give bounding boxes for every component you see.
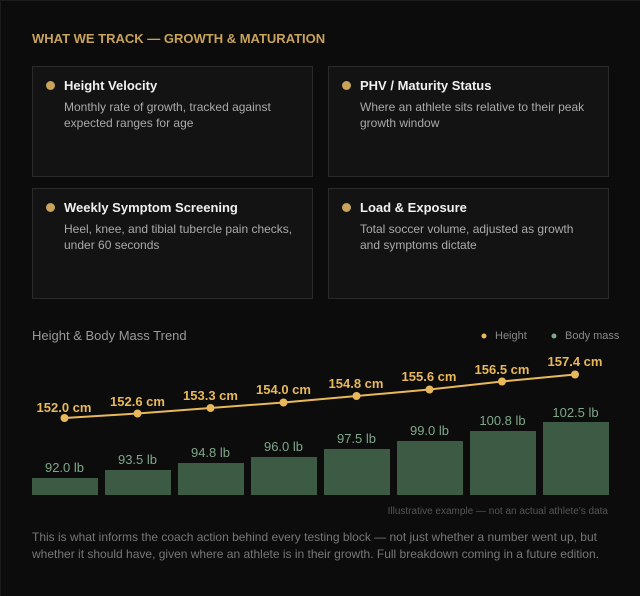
card text bbox=[64, 100, 271, 130]
card text: expected ranges for age bbox=[64, 116, 193, 130]
height line bbox=[64, 374, 575, 418]
body mass bars bbox=[32, 422, 609, 495]
panel: load and exposure bbox=[328, 188, 609, 299]
legend: Body mass bbox=[565, 330, 620, 342]
body mass labels: 93.5 lb bbox=[118, 452, 157, 467]
legend bbox=[482, 330, 620, 342]
panel: PHV maturity status bbox=[328, 66, 609, 177]
height labels: 157.4 cm bbox=[548, 354, 602, 369]
height labels: 154.8 cm bbox=[329, 376, 383, 391]
disclaimer note: Illustrative example — not an actual athlete's data bbox=[388, 506, 608, 517]
height labels: 156.5 cm bbox=[475, 362, 529, 377]
panel: height velocity bbox=[32, 66, 313, 177]
title: WHAT WE TRACK — GROWTH & MATURATION bbox=[32, 31, 325, 46]
card text: Monthly rate of growth, tracked against bbox=[64, 100, 271, 114]
body mass labels: 99.0 lb bbox=[410, 423, 449, 438]
legend: Height bbox=[495, 330, 527, 342]
body mass labels: 100.8 lb bbox=[479, 413, 526, 428]
height labels: 153.3 cm bbox=[183, 388, 238, 403]
body mass labels: 92.0 lb bbox=[45, 460, 84, 475]
panel: weekly symptom screening bbox=[32, 188, 313, 299]
closing paragraph: This is what informs the coach action behind every testing block — not just whether a number went up, but bbox=[32, 530, 597, 544]
card text: growth window bbox=[360, 116, 439, 130]
height labels: 152.0 cm bbox=[37, 400, 91, 415]
body mass labels: 94.8 lb bbox=[191, 445, 230, 460]
card heading: Weekly Symptom Screening bbox=[64, 200, 238, 215]
body mass labels bbox=[45, 405, 599, 475]
height labels bbox=[37, 354, 602, 415]
card heading: Height Velocity bbox=[64, 78, 157, 93]
body mass labels: 102.5 lb bbox=[552, 405, 599, 420]
icon: bullet bbox=[342, 81, 351, 90]
closing paragraph bbox=[32, 530, 599, 561]
body mass labels: 96.0 lb bbox=[264, 439, 303, 454]
card text bbox=[64, 222, 292, 252]
chart heading: Height & Body Mass Trend bbox=[32, 328, 187, 343]
card text: Where an athlete sits relative to their peak bbox=[360, 100, 584, 114]
height labels: 155.6 cm bbox=[402, 369, 456, 384]
body mass labels: 97.5 lb bbox=[337, 431, 376, 446]
closing paragraph: whether it should have, given where an athlete is in their growth. Full breakdown coming in a future edition. bbox=[32, 547, 599, 561]
card heading: PHV / Maturity Status bbox=[360, 78, 491, 93]
card text: under 60 seconds bbox=[64, 238, 159, 252]
height labels: 154.0 cm bbox=[256, 382, 311, 397]
card text: and symptoms dictate bbox=[360, 238, 477, 252]
card text: Heel, knee, and tibial tubercle pain checks, bbox=[64, 222, 292, 236]
card text: Total soccer volume, adjusted as growth bbox=[360, 222, 573, 236]
icon: bullet bbox=[342, 203, 351, 212]
icon: bullet bbox=[46, 203, 55, 212]
icon: bullet bbox=[46, 81, 55, 90]
card text bbox=[360, 100, 584, 130]
height points bbox=[60, 370, 579, 422]
card text bbox=[360, 222, 573, 252]
card heading: Load & Exposure bbox=[360, 200, 467, 215]
height labels: 152.6 cm bbox=[110, 394, 165, 409]
